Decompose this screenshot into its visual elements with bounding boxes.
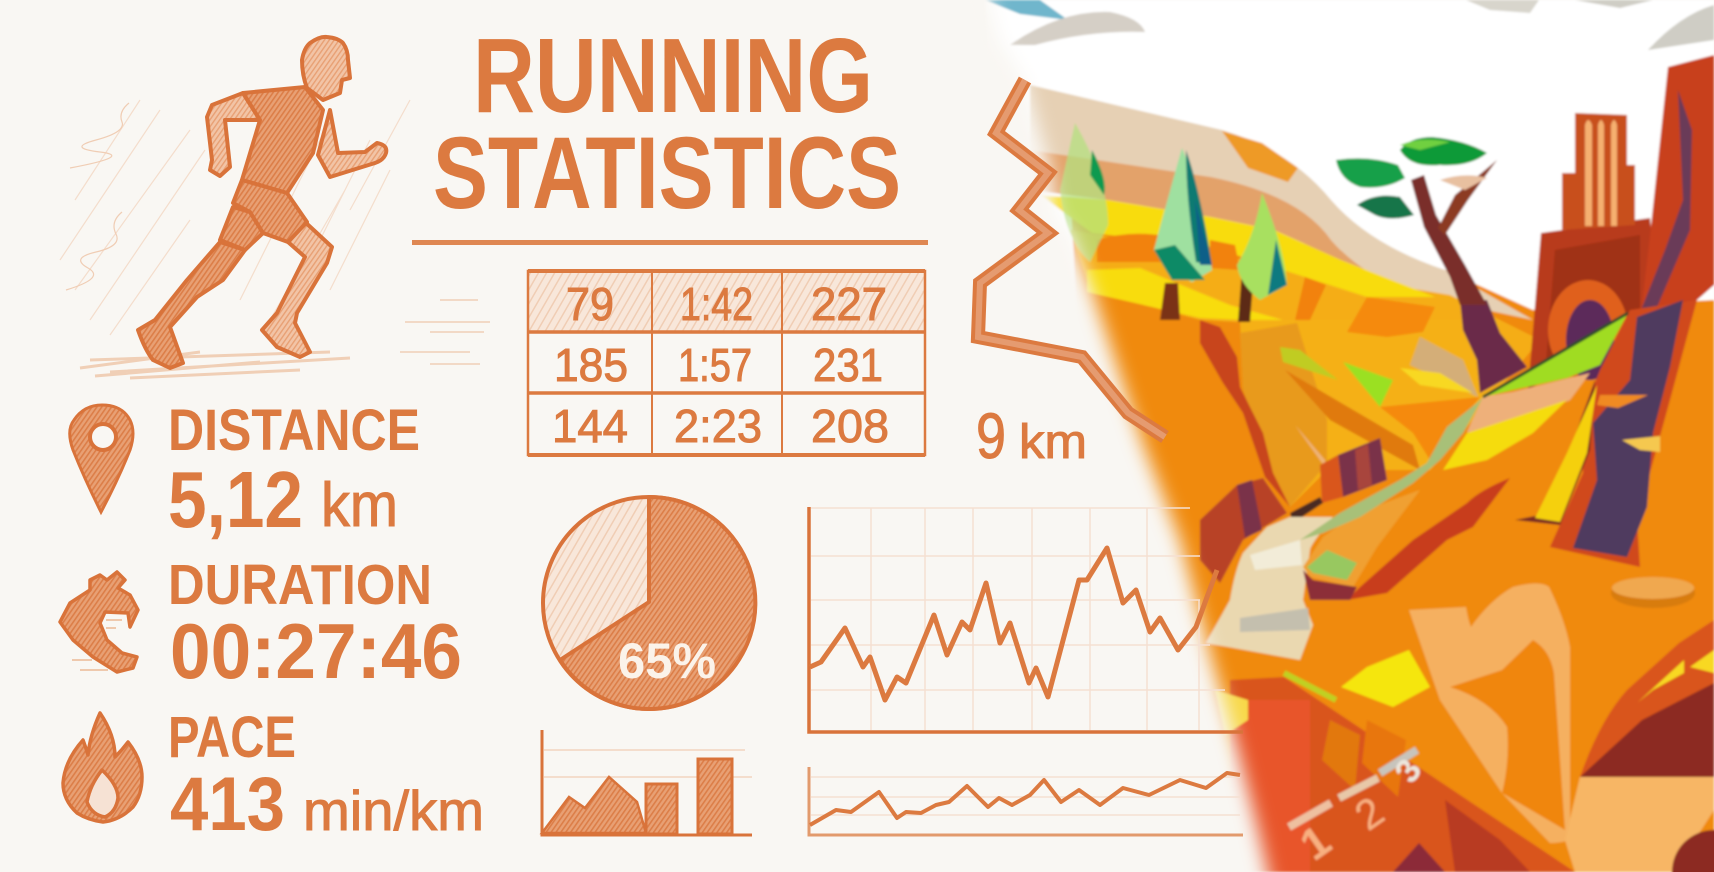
- head: [302, 37, 350, 100]
- mini area and bar chart: [542, 730, 752, 835]
- title: [433, 17, 901, 230]
- umbrella pine tree: [1336, 137, 1527, 393]
- back leg: [138, 242, 245, 368]
- back shorts: [220, 207, 263, 250]
- shorts: [233, 180, 307, 242]
- stats table: 2:23: [674, 400, 762, 452]
- stats table: 144: [552, 400, 628, 452]
- stats table: 1:42: [680, 278, 753, 330]
- distance stat: [70, 398, 420, 544]
- route distance label: [976, 400, 1087, 472]
- stats table: 185: [554, 339, 628, 391]
- route distance label: km: [1019, 416, 1087, 469]
- pace stat: [63, 705, 484, 847]
- lower line chart: [809, 767, 1243, 835]
- duration stat: [60, 553, 462, 695]
- pace stat: 413: [170, 762, 285, 847]
- distance stat: 5,12: [168, 455, 303, 544]
- pie chart 65%: [543, 497, 755, 709]
- distance stat: km: [321, 471, 398, 540]
- main line chart: [809, 507, 1243, 732]
- icon: flame: [63, 713, 142, 822]
- soft fade edge: [0, 0, 1274, 872]
- pace stat: PACE: [168, 705, 296, 770]
- stats table: 208: [811, 400, 889, 452]
- stats table: [528, 271, 925, 455]
- stats table: 231: [813, 339, 883, 391]
- title: STATISTICS: [433, 116, 901, 230]
- cliff and river: [1200, 320, 1510, 660]
- kilometre ticks and numbers: 3: [1387, 752, 1429, 790]
- front arm: [318, 110, 386, 177]
- kilometre ticks and numbers: 1: [1292, 816, 1340, 870]
- motion sketch background: [60, 100, 490, 378]
- red tower: [1528, 113, 1660, 390]
- green wedge: [1443, 313, 1628, 470]
- distance stat: DISTANCE: [168, 398, 420, 463]
- icon: running shoe: [60, 572, 138, 672]
- kilometre ticks and numbers: [1289, 750, 1429, 870]
- stats table: 1:57: [678, 339, 752, 391]
- right cliff column: [1515, 55, 1714, 567]
- torso: [242, 87, 323, 193]
- landscape artwork: [985, 0, 1714, 872]
- icon: map pin: [70, 405, 133, 512]
- lower fields: [1240, 297, 1500, 507]
- kilometre ticks and numbers: 2: [1346, 787, 1392, 839]
- route distance label: 9: [976, 400, 1006, 472]
- duration stat: DURATION: [168, 553, 432, 617]
- front leg: [262, 222, 332, 357]
- route line: [978, 80, 1165, 437]
- duration stat: 00:27:46: [170, 607, 462, 695]
- back arm: [207, 93, 260, 176]
- cypress trees: [1060, 123, 1287, 322]
- stats table: 79: [566, 278, 614, 330]
- stats table: 227: [811, 278, 887, 330]
- pie chart 65%: 65%: [618, 633, 716, 689]
- title: RUNNING: [473, 17, 873, 135]
- runner figure: [138, 37, 386, 368]
- pace stat: min/km: [303, 779, 484, 842]
